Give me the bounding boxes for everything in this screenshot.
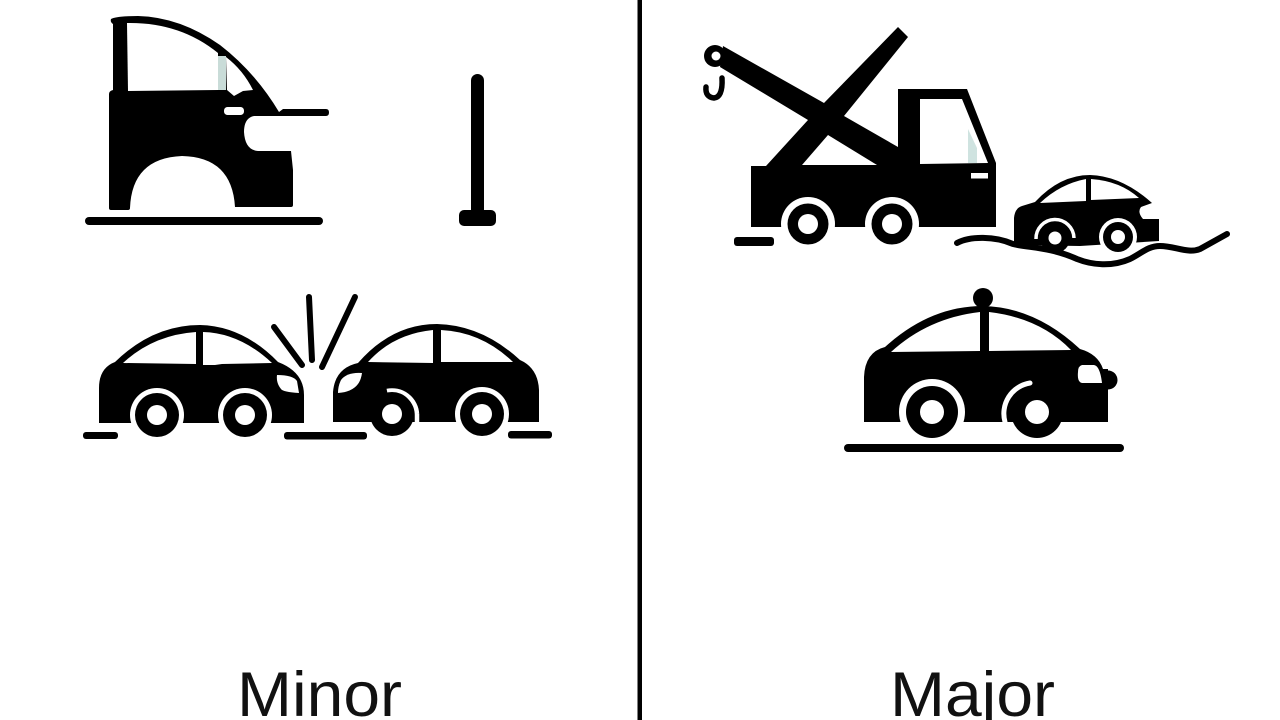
impact lines (274, 297, 355, 367)
crane ring (704, 45, 726, 67)
icon: damaged car door panel (85, 16, 329, 225)
truck body and crane arms (720, 27, 996, 227)
icon: car in flood water (957, 175, 1227, 264)
center divider (638, 0, 642, 720)
truck wheels (781, 197, 835, 251)
road lines (83, 431, 552, 440)
hook (706, 78, 722, 98)
icon: bollard post (459, 74, 496, 226)
left car (99, 325, 304, 442)
white triangle between arms (802, 135, 877, 165)
icon: tow truck (704, 27, 996, 251)
icon: two cars colliding (83, 297, 552, 442)
cab window (920, 99, 988, 164)
right car (333, 324, 539, 441)
icon: emergency vehicle (844, 288, 1124, 452)
water waves (957, 234, 1227, 264)
